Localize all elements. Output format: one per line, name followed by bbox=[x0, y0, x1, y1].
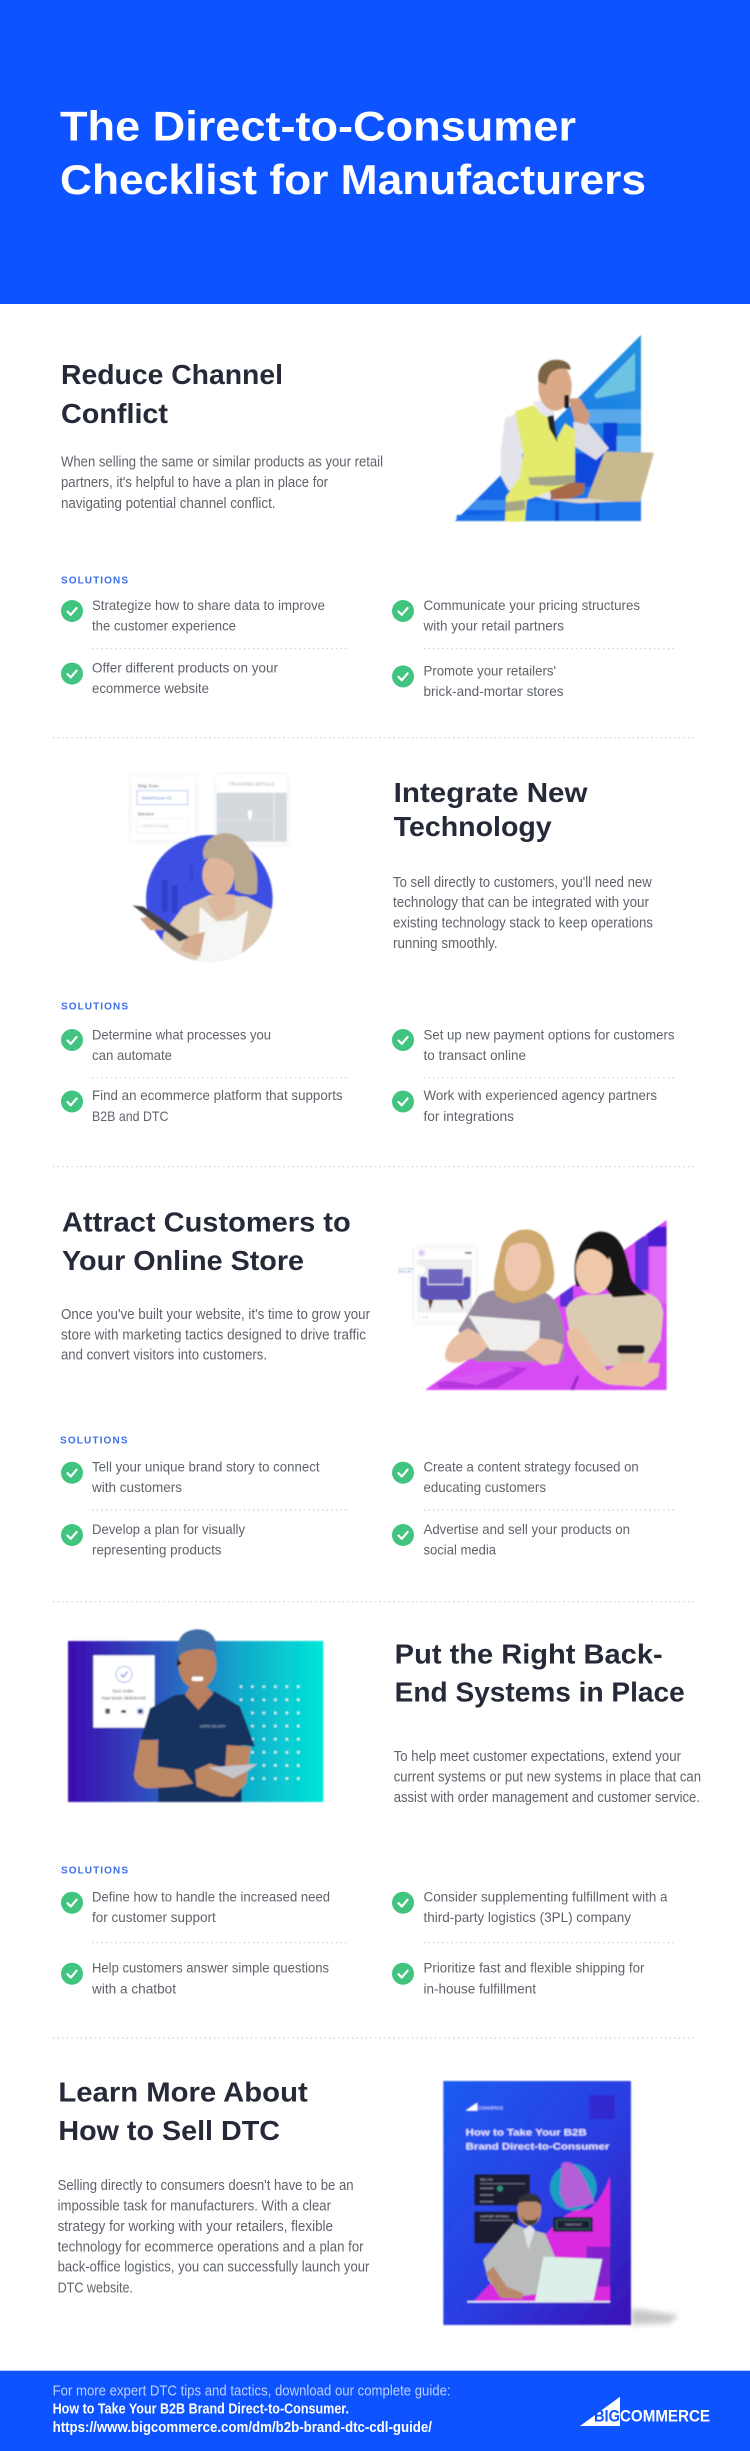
solution text: with your retail partners bbox=[423, 618, 564, 634]
image: two women with tablet and product card: C bbox=[420, 1251, 423, 1256]
solution text: for customer support bbox=[92, 1909, 216, 1925]
intro text: To help meet customer expectations, extend your bbox=[394, 1749, 681, 1765]
solution item bbox=[61, 597, 325, 634]
intro text bbox=[61, 455, 383, 512]
solution text: Tell your unique brand story to connect bbox=[92, 1459, 320, 1475]
solution item bbox=[61, 660, 278, 696]
intro text: store with marketing tactics designed to drive traffic bbox=[61, 1327, 366, 1343]
heading: Reduce Channel bbox=[61, 359, 283, 390]
heading: Put the Right Back- bbox=[395, 1638, 663, 1669]
icon: check bbox=[61, 1090, 83, 1112]
solution text: with customers bbox=[91, 1479, 182, 1495]
image: guide cover: SUPPORT OPTIONS bbox=[480, 2214, 509, 2218]
image: woman with tablet and shipping cards: Ship from bbox=[137, 783, 159, 789]
footer banner bbox=[0, 2371, 750, 2451]
image: guide cover bbox=[443, 2081, 678, 2325]
solution text: Communicate your pricing structures bbox=[424, 597, 640, 613]
solution item bbox=[392, 1459, 639, 1495]
footer text: How to Take Your B2B Brand Direct-to-Consumer. bbox=[53, 2401, 349, 2417]
solution item bbox=[61, 1026, 271, 1063]
heading: Technology bbox=[394, 811, 552, 842]
solution text: representing products bbox=[92, 1541, 222, 1557]
icon: check bbox=[392, 1963, 414, 1985]
image: guide cover: How to Take Your B2B bbox=[466, 2128, 587, 2138]
icon: check bbox=[392, 1029, 414, 1051]
icon: check bbox=[61, 1892, 83, 1914]
panel: learn more bbox=[58, 2077, 678, 2325]
icon: check bbox=[61, 663, 83, 685]
solution text bbox=[91, 1459, 320, 1495]
image: delivery woman on gradient background: UNITED DELIVERY bbox=[200, 1724, 226, 1728]
intro text: When selling the same or similar products as your retail bbox=[61, 455, 383, 471]
solution text bbox=[92, 1521, 245, 1557]
solution text bbox=[424, 663, 564, 699]
image: man with laptop on phone bbox=[455, 335, 654, 522]
body text: strategy for working with your retailers, flexible bbox=[58, 2219, 333, 2235]
logo: BigCommerce bbox=[580, 2397, 710, 2426]
solution item bbox=[392, 663, 564, 699]
body text: technology for ecommerce operations and a plan for bbox=[58, 2239, 364, 2255]
intro text bbox=[394, 1749, 701, 1806]
intro text: assist with order management and customer service. bbox=[394, 1790, 700, 1806]
solution item bbox=[392, 1026, 674, 1063]
solution text bbox=[424, 1888, 668, 1925]
heading bbox=[395, 1638, 685, 1708]
solution item bbox=[61, 1087, 343, 1124]
heading: Your Online Store bbox=[62, 1245, 304, 1276]
intro text: technology that can be integrated with your bbox=[393, 895, 649, 911]
heading: Attract Customers to bbox=[62, 1207, 351, 1238]
heading: How to Sell DTC bbox=[58, 2115, 280, 2146]
intro text: navigating potential channel conflict. bbox=[61, 496, 276, 512]
panel: attract customers bbox=[60, 1207, 675, 1557]
solution text: Create a content strategy focused on bbox=[424, 1459, 639, 1475]
intro text: and convert visitors into customers. bbox=[61, 1348, 267, 1364]
solution text: third-party logistics (3PL) company bbox=[424, 1909, 631, 1925]
heading bbox=[61, 359, 283, 429]
footer text: https://www.bigcommerce.com/dm/b2b-brand-dtc-cdl-guide/ bbox=[53, 2420, 432, 2436]
solution text: ecommerce website bbox=[92, 680, 209, 696]
solution item bbox=[392, 1960, 645, 1996]
icon: check bbox=[61, 1462, 83, 1484]
solutions label: SOLUTIONS bbox=[61, 1866, 128, 1877]
solution item bbox=[392, 1521, 630, 1557]
solution text: B2B and DTC bbox=[92, 1108, 168, 1124]
image: delivery woman on gradient background bbox=[68, 1629, 323, 1802]
intro text bbox=[61, 1307, 370, 1364]
image: woman with tablet and shipping cards: USPS® ready bbox=[142, 823, 170, 828]
image: two women with tablet and product card bbox=[398, 1220, 667, 1390]
solution text: Determine what processes you bbox=[92, 1026, 271, 1042]
logo: BigCommerce: COMMERCE bbox=[620, 2407, 710, 2426]
solutions label: SOLUTIONS bbox=[61, 1001, 128, 1012]
image: two women with tablet and product card: ♡ ○ ▾ bbox=[417, 1315, 428, 1320]
image: woman with tablet and shipping cards: Service bbox=[137, 811, 154, 817]
solution text: brick-and-mortar stores bbox=[424, 683, 564, 699]
icon: check bbox=[392, 1892, 414, 1914]
intro text bbox=[393, 875, 653, 952]
solution text: social media bbox=[424, 1541, 496, 1557]
solution text: in-house fulfillment bbox=[424, 1980, 536, 1996]
panel: back-end systems bbox=[61, 1629, 701, 1996]
solution text bbox=[424, 1026, 674, 1063]
body text: back-office logistics, you can successfully launch your bbox=[58, 2260, 370, 2276]
body text: DTC website. bbox=[58, 2280, 133, 2296]
solution text: to transact online bbox=[424, 1047, 526, 1063]
solution text: with a chatbot bbox=[91, 1980, 176, 1996]
solution text bbox=[424, 1459, 639, 1495]
image: woman with tablet and shipping cards: Warehouse #1 bbox=[142, 795, 172, 800]
solution text bbox=[92, 597, 325, 634]
icon: check bbox=[392, 1524, 414, 1546]
icon: check bbox=[392, 1090, 414, 1112]
image: guide cover: SELL ON bbox=[480, 2178, 492, 2182]
intro text: existing technology stack to keep operations bbox=[393, 916, 653, 932]
solution text: Set up new payment options for customers bbox=[424, 1026, 674, 1042]
icon: check bbox=[61, 600, 83, 622]
heading: End Systems in Place bbox=[395, 1677, 685, 1708]
solution text: Help customers answer simple questions bbox=[92, 1960, 329, 1976]
solutions label: SOLUTIONS bbox=[61, 576, 128, 586]
solution text: educating customers bbox=[424, 1479, 546, 1495]
intro text: current systems or put new systems in place that can bbox=[394, 1770, 701, 1786]
intro text: running smoothly. bbox=[393, 936, 498, 952]
panel: integrate new technology bbox=[61, 775, 675, 1124]
body text: Selling directly to consumers doesn't have to be an bbox=[58, 2178, 354, 2194]
image: guide cover: Brand Direct-to-Consumer bbox=[466, 2141, 610, 2151]
heading bbox=[62, 1207, 351, 1276]
heading: Integrate New bbox=[394, 777, 588, 808]
solution text: Find an ecommerce platform that supports bbox=[92, 1087, 343, 1103]
image: woman with tablet and shipping cards bbox=[132, 775, 287, 967]
image: guide cover: COMMERCE bbox=[477, 2105, 503, 2110]
solution text bbox=[423, 597, 640, 634]
icon: check bbox=[392, 665, 414, 687]
solution text: Prioritize fast and flexible shipping for bbox=[424, 1960, 645, 1976]
header banner bbox=[0, 0, 750, 304]
solution text: Consider supplementing fulfillment with a bbox=[424, 1888, 668, 1904]
title: The Direct-to-Consumer bbox=[60, 102, 576, 150]
footer text: For more expert DTC tips and tactics, download our complete guide: bbox=[53, 2384, 451, 2400]
solution item bbox=[61, 1521, 245, 1557]
footer text bbox=[53, 2384, 451, 2436]
solution text: Define how to handle the increased need bbox=[92, 1888, 330, 1904]
solution text bbox=[92, 1888, 330, 1925]
solution item bbox=[61, 1960, 329, 1996]
icon: check bbox=[61, 1029, 83, 1051]
image: two women with tablet and product card: Add to cart bbox=[398, 1269, 411, 1273]
icon: check bbox=[392, 1462, 414, 1484]
icon: check bbox=[61, 1963, 83, 1985]
solution item bbox=[61, 1888, 330, 1925]
solution item bbox=[61, 1459, 320, 1495]
solution text: the customer experience bbox=[92, 618, 236, 634]
solution text: Strategize how to share data to improve bbox=[92, 597, 325, 613]
image: guide cover: CHECKOUT bbox=[565, 2223, 582, 2227]
solution text: Offer different products on your bbox=[92, 660, 278, 676]
solution text: for integrations bbox=[424, 1108, 514, 1124]
solution text: Work with experienced agency partners bbox=[424, 1087, 657, 1103]
solution item bbox=[392, 1888, 668, 1925]
solution text: Advertise and sell your products on bbox=[424, 1521, 630, 1537]
icon: check bbox=[392, 600, 414, 622]
title bbox=[60, 102, 646, 203]
solutions label: SOLUTIONS bbox=[60, 1436, 128, 1447]
solution text bbox=[92, 1087, 343, 1124]
solution text: Promote your retailers' bbox=[424, 663, 556, 679]
intro text: partners, it's helpful to have a plan in place for bbox=[61, 475, 328, 491]
body text bbox=[58, 2178, 370, 2296]
title: Checklist for Manufacturers bbox=[60, 156, 646, 203]
heading bbox=[58, 2077, 308, 2146]
image: delivery woman on gradient background: has been delivered! bbox=[102, 1695, 146, 1700]
intro text: Once you've built your website, it's time to grow your bbox=[61, 1307, 370, 1323]
solution item bbox=[392, 597, 640, 634]
solution text bbox=[92, 1026, 271, 1063]
solution text bbox=[91, 1960, 329, 1996]
intro text: To sell directly to customers, you'll need new bbox=[393, 875, 652, 891]
image: delivery woman on gradient background: Your order bbox=[112, 1689, 134, 1694]
image: two women with tablet and product card: In your Store bbox=[398, 1266, 414, 1270]
solution text bbox=[424, 1960, 645, 1996]
solution text: Develop a plan for visually bbox=[92, 1521, 245, 1537]
solution item bbox=[392, 1087, 657, 1124]
body text: impossible task for manufacturers. With a clear bbox=[58, 2198, 331, 2214]
solution text bbox=[424, 1521, 630, 1557]
panel: reduce channel conflict bbox=[61, 335, 675, 699]
heading: Conflict bbox=[61, 398, 168, 429]
solution text bbox=[424, 1087, 657, 1124]
heading bbox=[394, 777, 588, 842]
solution text bbox=[92, 660, 278, 696]
icon: check bbox=[61, 1524, 83, 1546]
image: woman with tablet and shipping cards: TRACKING DETAILS bbox=[229, 781, 275, 786]
solution text: can automate bbox=[92, 1047, 172, 1063]
heading: Learn More About bbox=[58, 2077, 308, 2108]
logo: BigCommerce: BIG bbox=[594, 2408, 620, 2426]
